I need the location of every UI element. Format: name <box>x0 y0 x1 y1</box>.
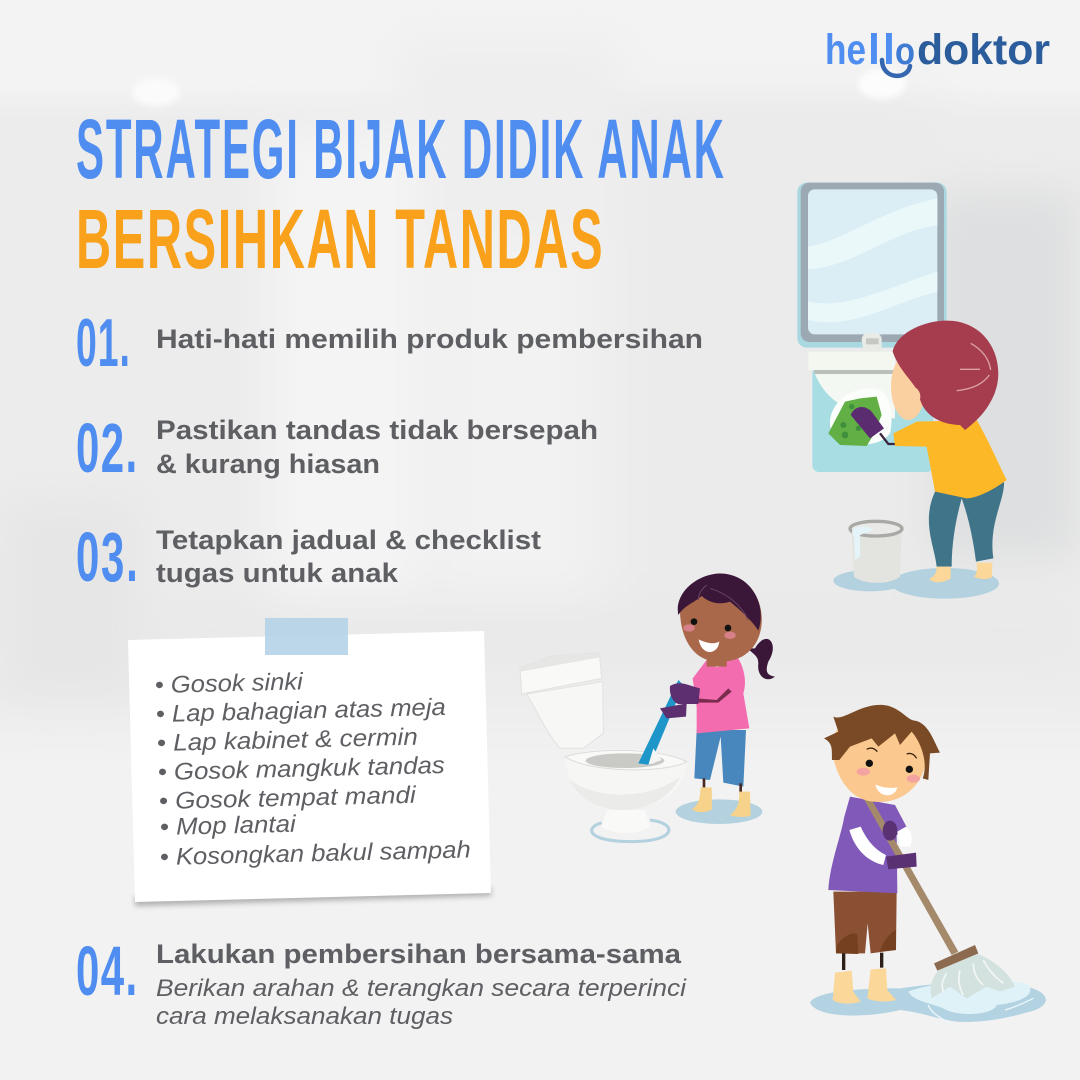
water puddle and shadow <box>810 981 1046 1028</box>
step 01: Hati-hati memilih produk pembersihan <box>156 324 703 354</box>
shirt <box>893 420 1007 498</box>
checklist items: • Gosok sinki <box>154 668 304 699</box>
face and hair <box>891 321 998 430</box>
gloves <box>883 821 917 869</box>
trousers <box>833 892 897 953</box>
step 02 <box>76 410 598 488</box>
illustration: girl scrubbing toilet <box>638 573 775 824</box>
checklist items <box>154 668 471 871</box>
step 01: 01. <box>76 304 130 381</box>
step 02: & kurang hiasan <box>156 449 380 479</box>
arms <box>849 827 912 865</box>
bucket <box>850 521 902 583</box>
trousers <box>694 730 746 787</box>
logo: hellodoktor <box>825 26 1050 76</box>
floor shadow <box>891 568 999 599</box>
legs and boots <box>692 778 751 817</box>
gloves <box>670 683 700 704</box>
step 03: tugas untuk anak <box>156 558 399 588</box>
logo: hellodoktor: ll <box>868 26 895 74</box>
illustration: toilet <box>520 653 687 842</box>
step 04: Lakukan pembersihan bersama-sama <box>156 939 682 969</box>
step 01 <box>76 304 703 381</box>
note: task checklist <box>128 618 491 906</box>
step 03: 03. <box>76 519 138 597</box>
checklist items: • Gosok mangkuk tandas <box>157 752 445 786</box>
shadow <box>676 799 762 824</box>
foam and sponge <box>828 389 897 446</box>
head <box>678 573 775 679</box>
jeans <box>929 482 1004 567</box>
step 03: Tetapkan jadual & checklist <box>156 525 541 555</box>
brush <box>638 680 683 765</box>
logo: hellodoktor: he <box>825 26 866 74</box>
tape <box>265 618 348 655</box>
checklist items: • Lap bahagian atas meja <box>155 694 446 728</box>
logo: hellodoktor: doktor <box>917 26 1050 74</box>
title <box>76 103 724 286</box>
step 04: Berikan arahan & terangkan secara terperinci <box>156 975 687 1002</box>
title: STRATEGI BIJAK DIDIK ANAK <box>76 103 724 197</box>
mop handle <box>864 797 958 955</box>
checklist items: • Gosok tempat mandi <box>158 782 417 815</box>
checklist items: • Kosongkan bakul sampah <box>159 836 471 871</box>
legs and boots <box>833 953 896 1004</box>
tank and bowl <box>527 682 603 748</box>
shoes <box>929 567 951 582</box>
shirt <box>828 797 907 893</box>
mop head <box>931 945 1015 998</box>
step 04 <box>76 933 687 1030</box>
illustration: boy mopping <box>810 705 1046 1028</box>
step 04: 04. <box>76 933 137 1011</box>
shirt <box>693 658 749 733</box>
step 04: cara melaksanakan tugas <box>156 1003 453 1030</box>
sink <box>808 333 933 472</box>
head <box>824 705 940 802</box>
mirror <box>797 183 947 348</box>
logo: hellodoktor: o <box>895 31 915 73</box>
step 02: Pastikan tandas tidak bersepah <box>156 415 598 445</box>
illustration: child cleaning the sink <box>797 183 1007 599</box>
checklist items: • Mop lantai <box>159 811 297 841</box>
checklist items: • Lap kabinet & cermin <box>156 724 418 757</box>
step 03 <box>76 519 541 597</box>
title: BERSIHKAN TANDAS <box>76 192 603 286</box>
step 02: 02. <box>76 410 137 488</box>
